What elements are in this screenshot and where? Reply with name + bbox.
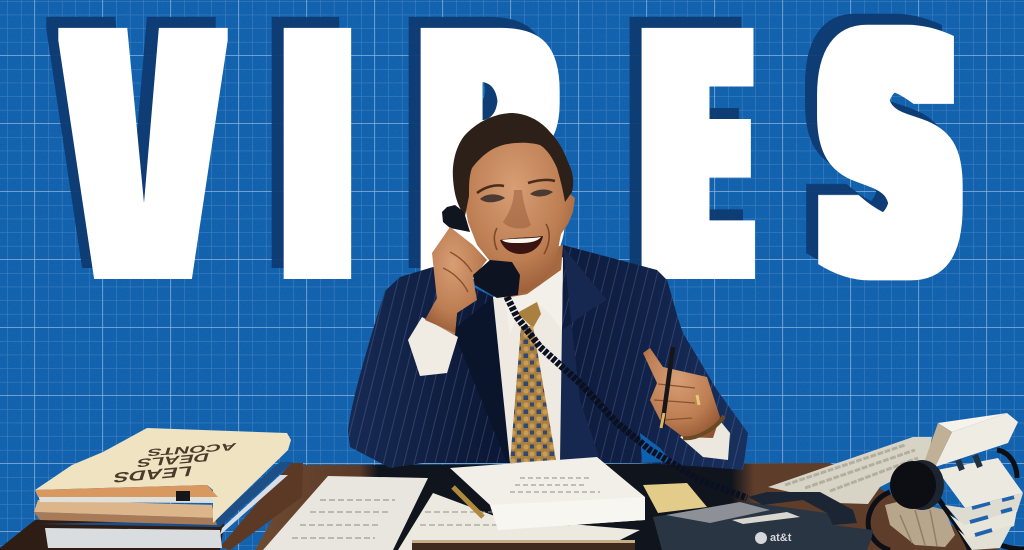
right hand xyxy=(643,348,720,438)
suit xyxy=(348,245,748,470)
top cards xyxy=(925,413,1018,467)
knob xyxy=(890,460,944,510)
rolodex xyxy=(868,413,1024,550)
phone cord xyxy=(507,297,747,498)
accounts: ACONTS xyxy=(146,441,238,458)
shirt xyxy=(493,257,563,463)
folder stack xyxy=(34,428,293,548)
smile creases xyxy=(494,224,549,254)
fan of cards xyxy=(885,500,955,547)
left cuff xyxy=(408,317,458,376)
nose xyxy=(503,190,531,229)
wire frame xyxy=(868,450,1024,550)
right cuff xyxy=(680,417,730,460)
AT&T logo xyxy=(755,532,767,544)
desk phone: at&t xyxy=(770,532,792,544)
hair xyxy=(453,113,573,216)
ring xyxy=(697,395,699,405)
wooden ruler tray xyxy=(412,540,635,550)
title: VIBES xyxy=(58,24,963,280)
tie xyxy=(510,302,556,463)
man on the phone xyxy=(348,113,748,470)
notebook xyxy=(450,457,645,530)
folder layers xyxy=(34,512,217,525)
handset mouthpiece xyxy=(473,260,520,298)
face xyxy=(453,113,575,293)
pen xyxy=(662,347,673,427)
legal pad xyxy=(263,476,428,550)
eyes and brows xyxy=(480,190,553,202)
title shadow: VIBES xyxy=(46,14,942,268)
open card xyxy=(937,458,1023,508)
mouth xyxy=(500,236,543,254)
deals: DEALS xyxy=(135,450,211,470)
top folder xyxy=(35,428,291,523)
clips xyxy=(958,455,980,470)
sticky note xyxy=(643,483,707,513)
collar xyxy=(505,258,563,335)
keyboard xyxy=(768,437,932,504)
desk phone xyxy=(653,492,873,550)
hand holding phone xyxy=(425,227,487,333)
watch strap xyxy=(683,416,724,438)
neck xyxy=(490,245,563,300)
binder clip xyxy=(176,491,190,501)
raised forearm xyxy=(425,298,457,335)
gap between torso and arm xyxy=(640,433,672,463)
card stack xyxy=(945,493,1023,550)
desk xyxy=(255,463,1000,550)
loose paper xyxy=(398,493,640,550)
label text xyxy=(111,441,238,485)
wooden tray xyxy=(0,463,303,550)
gold pen xyxy=(453,487,483,517)
handset earpiece xyxy=(442,205,470,232)
paper stack base xyxy=(45,528,222,548)
leads: LEADS xyxy=(111,462,194,485)
